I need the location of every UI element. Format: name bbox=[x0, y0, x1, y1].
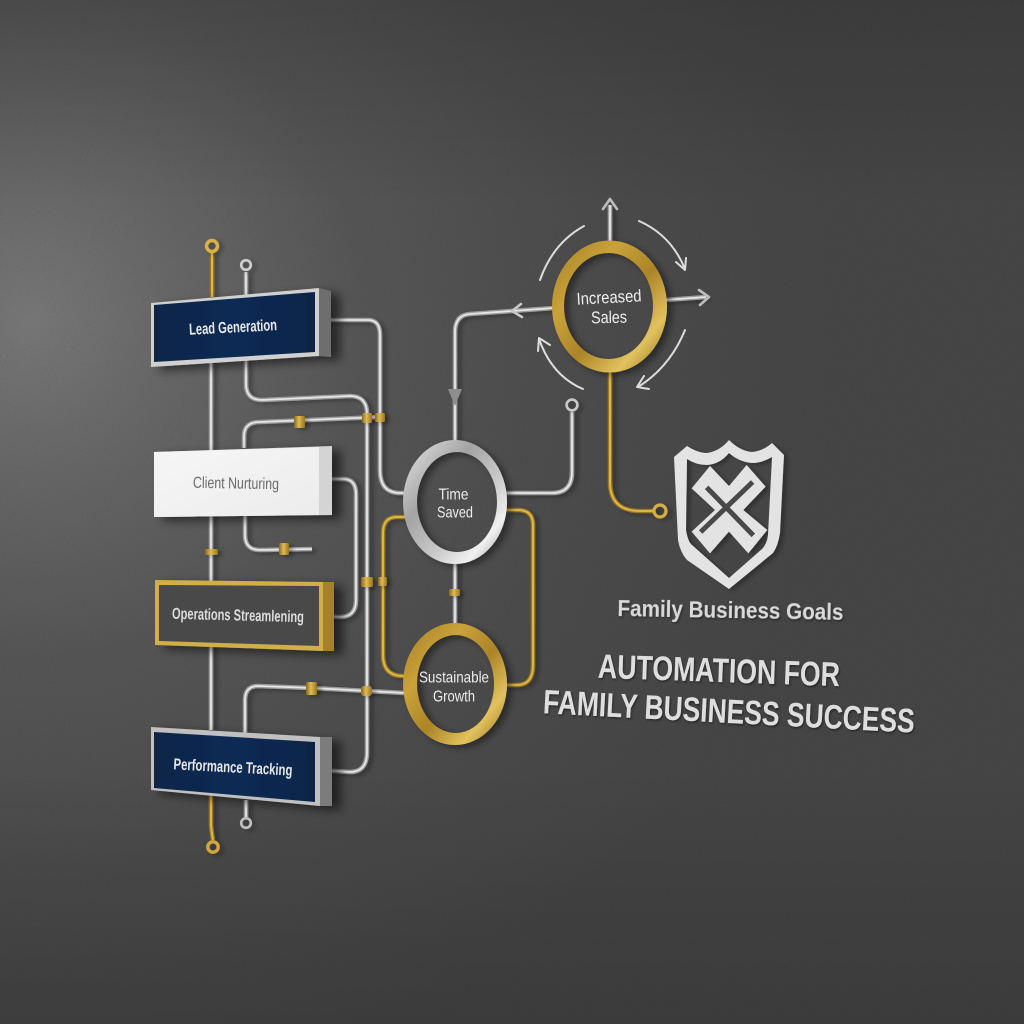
pipe: bottom silver stem bbox=[244, 800, 248, 817]
pipe: right gold loop bbox=[504, 510, 533, 685]
pipe: performance tracking to sustainable growth bbox=[245, 686, 405, 735]
arrowhead: down on return pipe bbox=[448, 389, 462, 406]
ring: bottom silver bbox=[241, 818, 251, 828]
title line 2: FAMILY BUSINESS SUCCESS bbox=[542, 683, 916, 741]
pipe: client nurturing lower stub bbox=[245, 516, 312, 550]
fitting: client lower stub bbox=[279, 543, 289, 555]
fitting: upper junction right bbox=[375, 413, 385, 422]
label: Operations Streamlening: Operations Streamlening bbox=[172, 606, 304, 626]
circle: Sustainable Growth bbox=[403, 623, 507, 745]
box: Operations Streamlening bbox=[155, 580, 334, 651]
ring: shield gold bbox=[654, 505, 666, 517]
label: Client Nurturing: Client Nurturing bbox=[193, 475, 279, 493]
circle: Time Saved bbox=[403, 440, 507, 564]
arrowhead: up bbox=[603, 199, 617, 209]
arrowhead: right bbox=[699, 290, 709, 305]
fitting: between circles bbox=[449, 589, 460, 596]
label: Sales: Sales bbox=[591, 308, 627, 327]
label: Sustainable Growth: Sustainable bbox=[419, 670, 489, 686]
label: Sustainable Growth: Growth bbox=[433, 688, 475, 706]
shield knot emblem bbox=[692, 465, 767, 553]
pipe: increased sales to time saved bbox=[455, 308, 554, 442]
arrow: lower left arc bbox=[538, 338, 583, 389]
subtitle: Family Business Goals: Family Business Goals bbox=[617, 595, 844, 625]
ring: bottom gold bbox=[208, 842, 218, 852]
fitting: left trunk bbox=[205, 549, 218, 555]
arc: upper left bbox=[540, 226, 584, 280]
fitting: performance branch bbox=[306, 682, 317, 695]
pipe: top silver stem bbox=[244, 272, 248, 296]
label: Time Saved: Saved bbox=[437, 504, 473, 522]
label: Performance Tracking: Performance Tracking bbox=[173, 756, 293, 780]
pipe: left vertical trunk bbox=[209, 360, 213, 730]
pipe: increased sales to shield bbox=[610, 370, 654, 511]
pipe: top gold stem bbox=[210, 252, 214, 297]
pipe: time saved to end ring bbox=[505, 412, 572, 493]
arrow: upper right arc bbox=[639, 221, 686, 270]
pipe: client nurturing to operations bbox=[325, 479, 356, 617]
flow arrows around Increased Sales bbox=[512, 199, 709, 389]
label: Time Saved: Time bbox=[438, 486, 469, 504]
network of silver pipes bbox=[211, 205, 706, 817]
shield logo bbox=[674, 440, 784, 589]
brass fittings bbox=[205, 413, 460, 696]
label: Lead Generation: Lead Generation bbox=[189, 317, 277, 339]
title bbox=[542, 648, 916, 741]
network of gold pipes bbox=[211, 252, 654, 840]
pipe: left gold loop bbox=[383, 517, 405, 676]
fitting: client top branch bbox=[294, 416, 305, 428]
box: Lead Generation bbox=[151, 288, 331, 367]
arrowhead: left on return pipe bbox=[512, 304, 522, 317]
pipe: lead generation to time saved bbox=[320, 320, 405, 493]
fitting: middle junction left bbox=[361, 577, 373, 587]
label: Increased: Increased bbox=[576, 286, 642, 309]
fitting: upper junction left bbox=[362, 413, 372, 423]
arrow: lower right arc bbox=[637, 330, 685, 389]
arrow pipe: up bbox=[608, 205, 612, 243]
end rings bbox=[206, 240, 666, 852]
pipe: client nurturing top branch bbox=[244, 417, 380, 448]
pipe: bottom gold stem bbox=[211, 795, 213, 840]
pipe: time saved to sustainable growth bbox=[453, 562, 457, 626]
ring: top gold bbox=[206, 240, 218, 252]
box: Performance Tracking bbox=[151, 727, 332, 806]
fitting: middle junction right bbox=[378, 577, 387, 586]
title line 1: AUTOMATION FOR bbox=[597, 648, 841, 694]
ring: right silver bbox=[567, 400, 577, 410]
arrow pipe: right bbox=[665, 297, 706, 300]
box: Client Nurturing bbox=[154, 446, 332, 517]
fitting: lower junction bbox=[361, 686, 372, 696]
pipe: lead generation to performance tracking bbox=[246, 360, 367, 772]
ring: top silver bbox=[241, 260, 251, 270]
circle: Increased Sales bbox=[552, 240, 667, 372]
